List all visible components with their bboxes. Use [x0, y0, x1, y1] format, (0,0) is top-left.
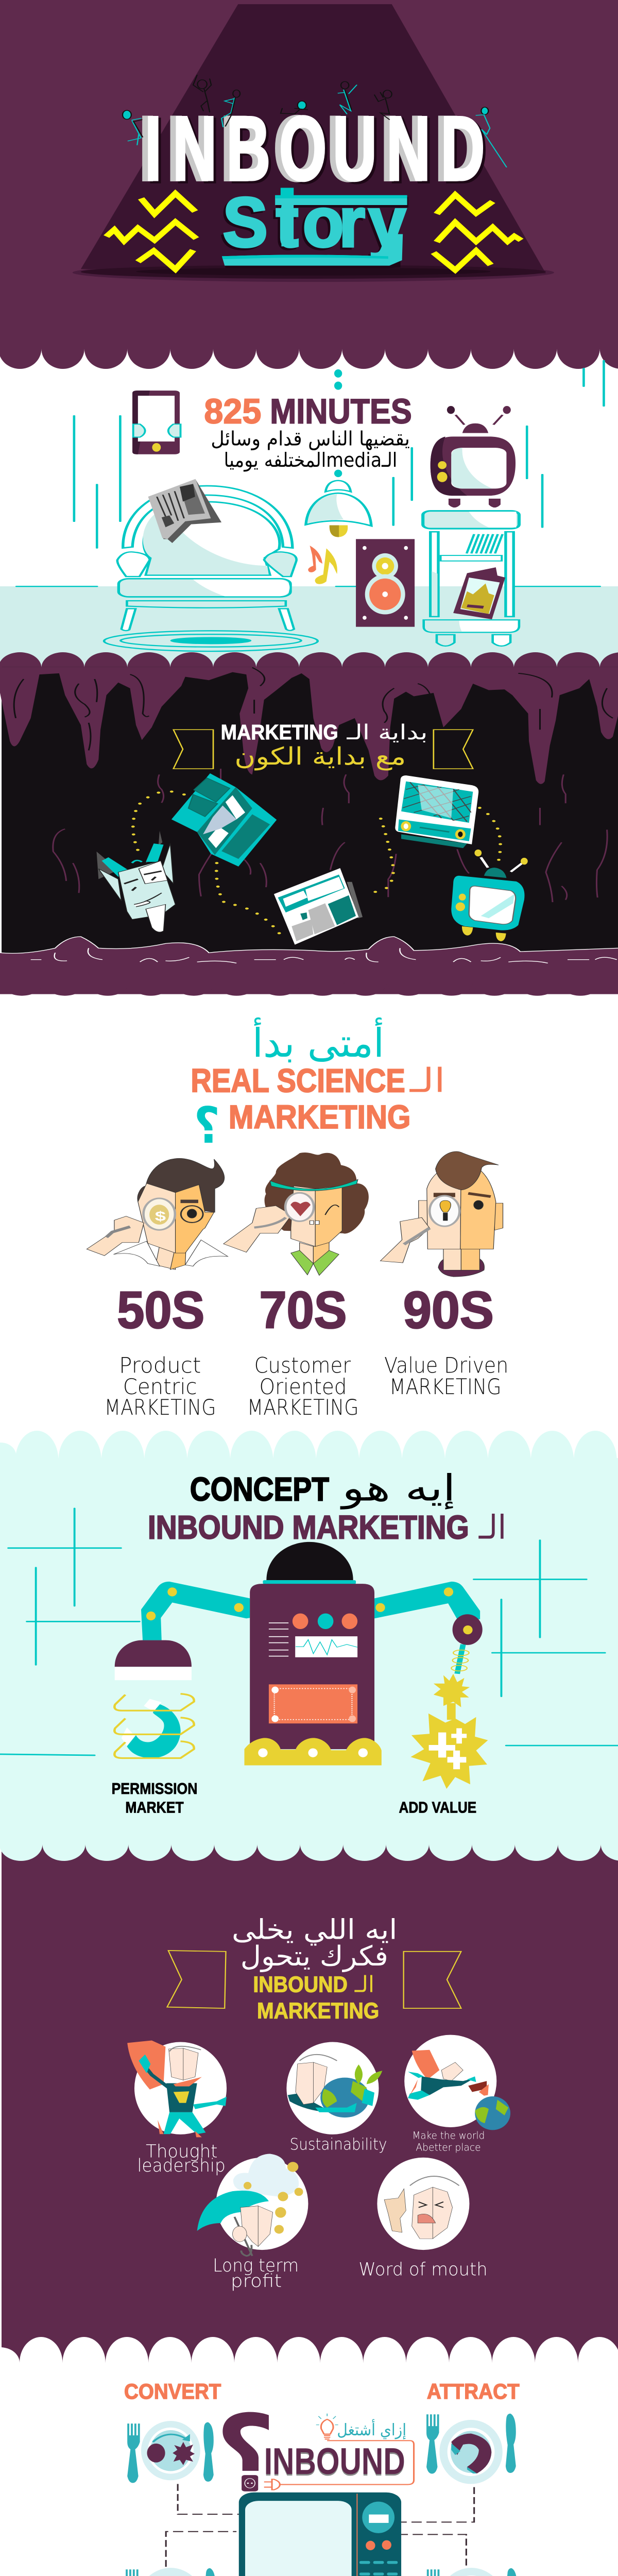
wiggly strands: [53, 769, 607, 902]
icon: 70s character with magnifier: [224, 1153, 369, 1276]
labels: PERMISSION: [112, 1780, 197, 1797]
icon: 90s character with magnifier: [381, 1151, 503, 1277]
icon: newspaper tilted: [274, 868, 363, 945]
heading: 825 minutes: [204, 392, 412, 431]
item labels: profit: [231, 2271, 282, 2292]
labels: [124, 2380, 520, 2576]
panel: 825 minutes media room: MINUTES: [270, 392, 412, 431]
item labels: leadership: [137, 2155, 226, 2176]
plate: attract: [426, 2414, 516, 2484]
title: Story: Story: [223, 183, 406, 262]
icon: newspaper: [148, 479, 221, 543]
icon: television: [431, 406, 516, 507]
icon: 50s character with magnifier: [87, 1158, 228, 1269]
heading block: أمتى بدأ: [252, 1018, 384, 1066]
ribbon outlines: [167, 1951, 461, 2008]
labels: [112, 1780, 476, 1816]
stick figures on the title: [123, 75, 506, 167]
heading block: فكرك يتحول: [241, 1941, 388, 1972]
decorative cyan lines: [16, 361, 604, 586]
era descriptions: MARKETING: [247, 1395, 358, 1420]
item: make the world a better place: [404, 2035, 510, 2130]
icon: teal television: [451, 850, 528, 941]
wordmark: INBOUND: INBOUND: [264, 2442, 405, 2484]
era descriptions: [105, 1352, 508, 1420]
heading: marketing began with the universe: بداية الـ: [347, 721, 427, 744]
era descriptions: Value Driven: [384, 1352, 508, 1378]
icon: shelf with magazine: [423, 511, 519, 646]
panel: beginning of marketing cave: [0, 667, 618, 996]
plate: close: [427, 2568, 517, 2576]
heading block: [191, 1018, 445, 1155]
panel: 825 minutes media room: يقضيها الناس قدام وسائل: [211, 428, 410, 450]
item labels: Long term: [213, 2255, 299, 2276]
heading block: [148, 1467, 506, 1547]
era descriptions: MARKETING: [105, 1395, 216, 1420]
panel: what turns your mind to inbound: [127, 1914, 510, 2292]
scallop: white arches above how-to panel: [0, 2337, 618, 2363]
panel: header: [73, 4, 554, 282]
title: INBOUND: INBOUND: [147, 99, 487, 201]
wordmark: INBOUND: [264, 2440, 405, 2484]
dots: [334, 369, 342, 390]
icon: rug: [104, 631, 318, 651]
heading: marketing began with the universe: [221, 721, 427, 770]
yellow zigzags, left: [107, 193, 196, 269]
text: arabic caption: الـmediaالمختلفه يوميا: [224, 449, 397, 471]
dotted paths: [133, 791, 501, 937]
item labels: Thought: [146, 2141, 217, 2162]
item: sustainability: [286, 2042, 382, 2134]
item labels: [137, 2130, 488, 2292]
heading block: REAL SCIENCE: [191, 1062, 405, 1099]
icon: hanging lamp: [306, 470, 371, 537]
icon: armchair: [117, 486, 297, 631]
era descriptions: Centric: [123, 1374, 197, 1399]
icon: booklet: [171, 773, 277, 867]
item: long term profit: [197, 2154, 308, 2256]
stalactites: [0, 667, 618, 784]
panel: when did real science marketing begin: [87, 1018, 508, 1420]
panel: inbound marketing concept: [0, 1467, 618, 1816]
era labels: [117, 1281, 494, 1340]
spotlight cone: [73, 4, 554, 282]
item labels: Abetter place: [416, 2142, 481, 2154]
title: INBOUND: INBOUND: [139, 98, 479, 199]
scallop: concept panel bottom: [0, 1844, 618, 1861]
heading block: الـ: [354, 1971, 374, 1997]
text: arabic caption: [211, 428, 410, 471]
item: word of mouth: [377, 2158, 469, 2250]
icon: question mark: [222, 2412, 269, 2471]
heading: 825 minutes: 825: [204, 392, 261, 431]
labels: ADD VALUE: [399, 1799, 476, 1816]
icon: 50s character with magnifier: $: [155, 1209, 166, 1224]
item labels: Word of mouth: [358, 2259, 488, 2280]
wordmark: INBOUND: INBOUND: [264, 2440, 405, 2482]
era labels: 70S: [260, 1281, 347, 1340]
scallop: media room floor edge: [0, 652, 618, 685]
floor slime: [0, 937, 618, 994]
icon: socket: [242, 2475, 258, 2492]
icon: music notes: [308, 546, 337, 584]
panel: 825 minutes media room: [16, 361, 604, 651]
era descriptions: Customer: [254, 1352, 351, 1378]
heading block: CONCEPT: [190, 1471, 329, 1508]
heading block: MARKETING: [257, 1998, 379, 2023]
item labels: Sustainability: [289, 2135, 387, 2154]
labels: MARKET: [125, 1799, 184, 1816]
era descriptions: MARKETING: [389, 1374, 501, 1399]
heading block: ايه اللي يخلى: [232, 1914, 397, 1946]
icon: bulb and cable with plug: [264, 2414, 414, 2490]
illustration: robot: [141, 1542, 480, 1766]
era descriptions: Product: [119, 1352, 201, 1378]
icon: speaker: [356, 539, 415, 627]
icon: cartoon devil reading: [96, 831, 176, 932]
drip outlines: [14, 668, 613, 750]
heading block: [232, 1914, 397, 2023]
heading: how do I work: إزاي أشتغل: [337, 2419, 406, 2439]
era labels: 90S: [403, 1281, 494, 1340]
title: Story: Story: [220, 185, 404, 264]
heading: marketing began with the universe: MARKETING: [221, 721, 338, 744]
ribbon outlines: [174, 730, 473, 769]
icon: value gears: [410, 1614, 488, 1789]
plate: convert: [127, 2421, 214, 2483]
dashed connectors: [166, 2484, 474, 2567]
heading block: INBOUND: [253, 1972, 348, 1997]
icon: phone: [132, 391, 181, 454]
heading block: إيه هو: [340, 1467, 456, 1510]
heading block: الـ: [478, 1508, 506, 1547]
labels: ATTRACT: [427, 2380, 520, 2404]
heading block: MARKETING: [229, 1099, 410, 1136]
icon: radio: [395, 775, 479, 848]
labels: CONVERT: [124, 2380, 221, 2404]
yellow zigzags, right: [434, 195, 521, 270]
item labels: Make the world: [413, 2130, 485, 2142]
title: INBOUND: INBOUND: [145, 98, 485, 199]
heading block: الـ: [409, 1062, 445, 1100]
scallop: cave bottom: [0, 971, 618, 996]
cave background: [2, 667, 618, 975]
decorative cyan lines: [0, 1509, 618, 1755]
plate: delight: [126, 2568, 216, 2576]
era descriptions: Oriented: [260, 1374, 347, 1399]
item: thought leadership: [127, 2041, 227, 2137]
era labels: 50S: [117, 1281, 204, 1340]
heading: marketing began with the universe: مع بداية الكون: [234, 742, 406, 770]
icon: magnet with claw: [114, 1640, 194, 1758]
icon: microwave: [239, 2493, 401, 2576]
panel: how inbound works: [124, 2380, 520, 2576]
scallop: header bottom edge: [0, 0, 618, 369]
heading block: ؟: [194, 1096, 220, 1155]
